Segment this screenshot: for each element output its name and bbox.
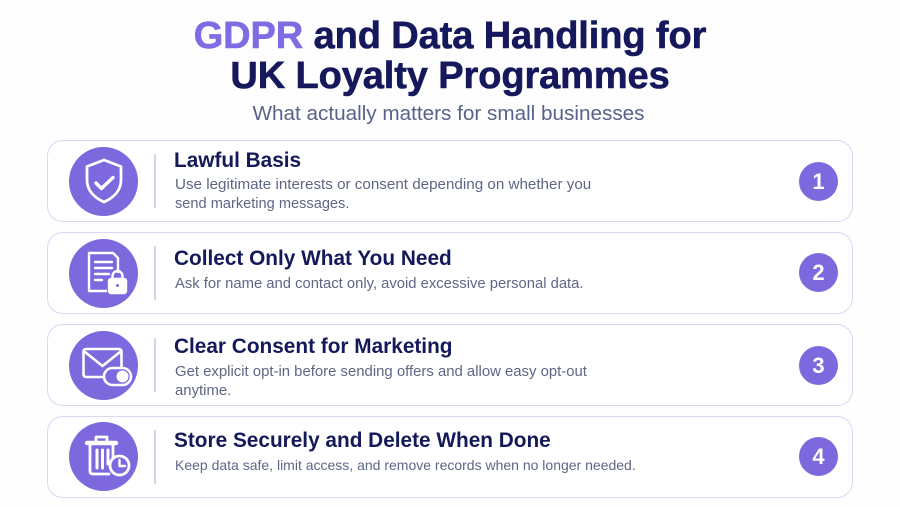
- title: GDPR and Data Handling for: [194, 15, 706, 57]
- icon: document with padlock: [69, 239, 138, 308]
- number badge 3: [799, 346, 838, 385]
- description: [175, 176, 591, 212]
- number badge 3: 3: [812, 353, 825, 378]
- heading: Collect Only What You Need: [174, 247, 452, 270]
- subtitle: What actually matters for small businesses: [252, 102, 645, 125]
- description: Get explicit opt-in before sending offers and allow easy opt-out: [175, 364, 587, 380]
- heading: Clear Consent for Marketing: [174, 335, 452, 358]
- panel: collect only what you need: [47, 232, 853, 314]
- description: Keep data safe, limit access, and remove records when no longer needed.: [175, 457, 636, 473]
- number badge 4: [799, 437, 838, 476]
- heading: Store Securely and Delete When Done: [174, 429, 551, 452]
- number badge 4: 4: [812, 444, 825, 469]
- heading: Lawful Basis: [174, 149, 301, 172]
- panel: store securely and delete when done: [47, 416, 853, 498]
- description: send marketing messages.: [175, 196, 349, 212]
- description: Use legitimate interests or consent depending on whether you: [175, 176, 591, 193]
- description: [175, 364, 587, 399]
- number badge 2: 2: [812, 260, 825, 285]
- description: anytime.: [175, 383, 231, 399]
- icon: trash bin with clock: [69, 422, 138, 491]
- title: [194, 15, 706, 97]
- icon: envelope with toggle: [69, 331, 138, 400]
- title: UK Loyalty Programmes: [230, 55, 670, 97]
- description: Ask for name and contact only, avoid excessive personal data.: [175, 276, 584, 292]
- icon: shield with check: [69, 147, 138, 216]
- number badge 1: 1: [812, 169, 825, 194]
- panel: lawful basis: [47, 140, 853, 222]
- panel: clear consent for marketing: [47, 324, 853, 406]
- number badge 1: [799, 162, 838, 201]
- number badge 2: [799, 253, 838, 292]
